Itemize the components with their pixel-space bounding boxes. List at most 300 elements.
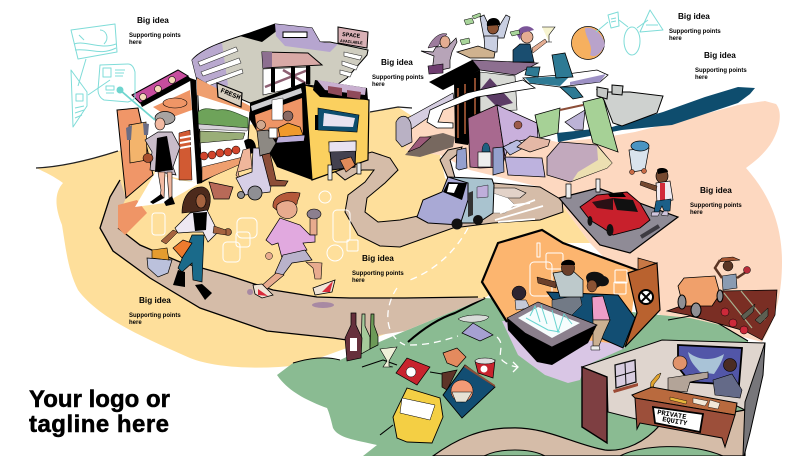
house outline — [482, 230, 637, 322]
products on hill — [345, 313, 495, 443]
shelf of fish — [200, 131, 245, 143]
roof sign — [313, 80, 368, 100]
roof sign panels — [328, 86, 361, 99]
big idea: right over water — [695, 51, 747, 81]
land: peach region — [405, 100, 782, 342]
parking pad with car — [559, 179, 678, 253]
shorts — [275, 250, 312, 275]
shelf — [198, 124, 248, 131]
big idea: top left: Big idea — [137, 16, 169, 25]
desk top — [632, 387, 737, 415]
produce section — [197, 78, 250, 182]
hologram buildings — [526, 305, 572, 332]
back wall — [582, 340, 765, 425]
door — [582, 367, 607, 443]
woman left body — [421, 38, 457, 72]
upper wing — [552, 53, 573, 78]
pink canopy — [132, 70, 188, 103]
teal: document — [608, 12, 619, 28]
person: woman walking with bags — [147, 187, 232, 300]
hologram screen — [518, 307, 580, 338]
door cross — [641, 292, 651, 302]
big idea: top right: here — [669, 36, 682, 42]
money pile — [457, 46, 495, 58]
table base — [507, 302, 597, 365]
mother hair — [586, 272, 609, 292]
globe land — [585, 28, 605, 56]
shark — [688, 352, 724, 374]
black pillar — [190, 78, 202, 184]
yellow building — [305, 85, 369, 180]
door round window — [639, 290, 653, 304]
farm — [667, 257, 777, 340]
shelf of tomatoes — [200, 146, 240, 160]
big idea: bottom left — [129, 296, 181, 326]
right leg — [306, 262, 322, 279]
bollards — [566, 179, 600, 198]
land: green region — [277, 298, 748, 456]
wall ornament — [514, 121, 522, 129]
upper windows — [283, 32, 307, 38]
sleeper — [517, 136, 550, 152]
awning — [262, 52, 322, 68]
fresh sign: FRESH — [219, 87, 241, 103]
teal belly — [525, 76, 570, 86]
sign: space available: AVAILABLE — [340, 40, 363, 46]
teal: triangle — [640, 10, 663, 32]
sunroof — [608, 193, 626, 197]
big idea: top right: Big idea — [678, 12, 710, 21]
wheelchair — [236, 148, 272, 195]
windshield — [443, 182, 467, 200]
big idea: bottom left: here — [129, 320, 142, 326]
man head — [724, 358, 736, 372]
teal node — [116, 86, 124, 94]
face — [277, 201, 297, 219]
orange bag — [173, 240, 192, 258]
big idea: center top — [372, 58, 424, 88]
robot vacuum — [629, 141, 649, 174]
father hair — [561, 260, 575, 265]
hand — [224, 228, 232, 236]
big idea: center top: here — [372, 82, 385, 88]
private equity sign — [653, 407, 703, 432]
statues — [456, 147, 504, 175]
bag label — [400, 398, 435, 420]
coastline strokes — [36, 107, 412, 168]
mother face — [587, 280, 597, 292]
big idea: by the road: Supporting points — [352, 271, 404, 277]
tail — [525, 67, 540, 77]
truck — [417, 177, 543, 230]
mother shirt — [592, 296, 610, 320]
dock shutter — [329, 141, 356, 152]
right wall — [743, 343, 765, 456]
road inner loop — [493, 188, 526, 198]
lilac bag — [147, 258, 172, 277]
house floor — [502, 320, 625, 383]
table top — [507, 302, 597, 347]
door tab — [638, 258, 656, 270]
person: man walking with phone — [247, 192, 335, 308]
wine bottle green — [370, 314, 378, 349]
face — [196, 194, 206, 208]
boots — [173, 270, 212, 300]
logo tagline: Your logo or — [29, 386, 170, 413]
drone — [458, 315, 493, 341]
counter — [276, 135, 305, 143]
truck side — [448, 177, 494, 223]
hair — [244, 139, 256, 154]
teal connectors — [596, 20, 648, 32]
stripes on rack — [180, 136, 191, 148]
mother legs — [593, 320, 610, 346]
lavender belly — [570, 74, 606, 85]
can label — [480, 366, 488, 372]
white floor in store — [135, 173, 200, 207]
man shirt — [484, 36, 498, 52]
big idea: bottom left: Big idea — [139, 296, 171, 305]
shirt — [266, 218, 315, 258]
kitchen sign — [272, 98, 283, 120]
safe — [478, 152, 491, 167]
child head — [512, 286, 526, 300]
counter person — [278, 123, 303, 137]
teal doodles: shopper thoughts — [71, 24, 155, 127]
tower and roof — [429, 60, 538, 145]
farmer overalls — [722, 274, 737, 290]
sign: space available — [338, 27, 368, 48]
wine label — [350, 338, 357, 351]
woman left hair — [428, 34, 447, 48]
airplane — [523, 53, 608, 99]
smoke — [493, 193, 515, 213]
kitchen truss — [251, 88, 302, 111]
pillow — [503, 140, 527, 155]
big idea: on peach land: Big idea — [700, 186, 732, 195]
car windshield — [613, 198, 638, 212]
desk items — [670, 397, 687, 404]
wine bottle light green — [361, 314, 370, 354]
mother shoes — [591, 346, 600, 350]
sign: space available: SPACE — [342, 31, 361, 40]
road: bottom path — [433, 410, 745, 456]
dark purple block — [480, 78, 513, 107]
cereal bowl — [452, 392, 472, 402]
beams — [265, 70, 308, 87]
swoosh — [427, 80, 535, 128]
salmon floor under door — [118, 200, 147, 235]
doodle card with star — [71, 24, 117, 59]
cereal plate — [451, 380, 473, 402]
window — [615, 360, 636, 388]
basket — [209, 182, 233, 199]
man advisor — [713, 374, 742, 398]
road edges — [100, 180, 478, 340]
face — [155, 118, 165, 130]
clothing interior — [140, 82, 198, 183]
field rows — [724, 291, 765, 328]
lower front — [202, 157, 247, 181]
small boat — [565, 110, 585, 130]
phone hand — [307, 209, 321, 219]
ship stacks — [597, 85, 623, 99]
left leg — [260, 273, 284, 290]
robot tractor — [678, 276, 720, 306]
big idea: top right — [669, 12, 721, 42]
big idea: bottom left: Supporting points — [129, 313, 181, 319]
purple roof — [472, 60, 538, 75]
bedspread — [547, 142, 612, 182]
father head — [562, 260, 574, 276]
big idea: by the road: here — [352, 278, 365, 284]
mirror — [482, 143, 490, 152]
connector lines — [78, 59, 110, 95]
store complex — [117, 24, 369, 198]
person: older woman shopper — [143, 112, 180, 206]
dress — [155, 136, 173, 172]
window side — [315, 115, 318, 130]
logo tagline: tagline here — [29, 411, 169, 438]
brown door — [625, 263, 660, 347]
bed base — [505, 157, 545, 177]
father pants — [552, 295, 582, 317]
curb rod — [641, 226, 659, 237]
woman right dress — [513, 44, 534, 62]
back building black wedge — [240, 24, 278, 42]
man face — [488, 22, 498, 34]
shadows — [247, 289, 334, 308]
farmer head — [723, 261, 733, 271]
big idea: on peach land — [690, 186, 742, 216]
back building window rows — [198, 47, 362, 86]
bedroom — [456, 97, 618, 182]
big idea: right over water: here — [695, 75, 708, 81]
screen — [678, 345, 742, 385]
martini — [380, 347, 397, 367]
clothing interior salmon wall — [153, 90, 192, 118]
shoe accents — [258, 281, 333, 296]
ceiling light — [163, 98, 187, 108]
canopy black strip — [140, 76, 192, 107]
roof sign lilac band — [317, 80, 366, 95]
woman left bag — [428, 64, 443, 74]
father arm — [537, 277, 556, 288]
garment sleeves — [126, 123, 149, 140]
boy with remote — [640, 168, 673, 216]
dirt pile — [405, 133, 455, 157]
tower — [454, 70, 480, 145]
cargo window — [477, 185, 488, 198]
woman left face — [440, 36, 450, 48]
jeans — [654, 199, 671, 212]
house with family — [482, 230, 660, 365]
wheels — [588, 216, 592, 226]
advisor head — [673, 356, 687, 370]
hanging garment — [129, 122, 147, 163]
farmer hat — [718, 257, 740, 262]
door — [468, 191, 473, 217]
fuselage — [523, 70, 608, 87]
bag contents — [152, 248, 169, 260]
shoes — [150, 194, 175, 206]
big idea: on peach land: here — [690, 210, 703, 216]
clothing rack — [179, 130, 192, 180]
jeans — [178, 235, 204, 282]
train — [396, 93, 454, 147]
white wall doodles — [530, 243, 627, 296]
teal: oval tag — [624, 27, 640, 55]
kitchen unit — [250, 82, 312, 180]
land: yellow region — [36, 107, 590, 368]
water — [557, 87, 755, 142]
man hair — [487, 18, 500, 26]
white doodles: around walkers — [152, 191, 358, 262]
big idea: top left — [129, 16, 181, 46]
left hand — [266, 252, 272, 260]
big idea: top right: Supporting points — [669, 29, 721, 35]
kitchen interior — [255, 98, 303, 142]
doodle list card — [98, 64, 135, 102]
tower orange bars — [458, 78, 475, 138]
arm — [213, 226, 226, 235]
big idea: center top: Supporting points — [372, 75, 424, 81]
person: man with tablet — [256, 120, 288, 186]
legs — [158, 172, 172, 198]
desk papers — [693, 398, 720, 409]
fresh sign — [217, 83, 242, 107]
ship — [565, 85, 663, 130]
teal pointer — [120, 90, 155, 120]
snack box logo — [406, 367, 416, 377]
big idea: by the road: Big idea — [362, 254, 394, 263]
arm to bag — [161, 230, 178, 244]
windshield glint — [447, 184, 458, 193]
office — [582, 340, 765, 456]
black roof — [429, 60, 480, 90]
red can — [475, 360, 495, 378]
window cross — [615, 363, 636, 385]
arm — [640, 181, 657, 191]
doodle tall panel — [71, 70, 87, 127]
skin — [236, 148, 252, 180]
shop door — [117, 108, 153, 198]
raised forearm — [310, 217, 317, 235]
yellow bag — [393, 388, 443, 443]
posts — [271, 66, 310, 92]
soil — [667, 290, 777, 340]
wheels — [452, 218, 462, 230]
car body — [580, 192, 650, 235]
purple rock — [408, 137, 431, 152]
woman advisor — [668, 372, 708, 392]
green ridge outlines — [293, 316, 748, 435]
chef head — [283, 111, 293, 121]
father shirt — [553, 270, 583, 297]
yellow building window — [318, 108, 359, 132]
hair — [273, 192, 300, 213]
windows under awning — [263, 67, 310, 95]
leaves — [741, 304, 768, 324]
green patches in bottom path — [484, 447, 723, 456]
big idea: top left: here — [129, 40, 142, 46]
jacket — [175, 210, 218, 242]
box brown edge — [464, 365, 495, 387]
big idea: on peach land: Supporting points — [690, 203, 742, 209]
lettuce — [198, 109, 248, 128]
big idea: by the road — [352, 254, 404, 284]
strawberries — [721, 308, 748, 334]
man arms — [480, 15, 510, 38]
private equity sign: EQUITY — [661, 416, 688, 428]
lamp — [643, 373, 661, 395]
hair — [182, 187, 210, 213]
brown box — [442, 370, 457, 390]
loading dock — [329, 141, 356, 170]
gray annex — [480, 72, 517, 112]
big idea: right over water: Supporting points — [695, 68, 747, 74]
woman right hair — [517, 26, 534, 40]
woman right face — [521, 31, 533, 43]
tractor wheels — [678, 295, 686, 309]
back building purple top — [275, 24, 338, 52]
shoes — [651, 211, 668, 216]
speed lines — [495, 200, 543, 222]
sofa — [547, 292, 635, 348]
canopy lights — [140, 76, 176, 100]
dashed flight path — [388, 228, 517, 367]
bollards — [328, 163, 361, 180]
martini glass — [542, 27, 555, 42]
curtain rod — [560, 105, 583, 110]
woman right arm — [532, 39, 547, 53]
orange parcel — [443, 348, 466, 367]
flying dollars — [460, 13, 520, 45]
person: wheelchair user — [236, 139, 272, 200]
navy cereal box — [443, 365, 495, 418]
private equity sign: PRIVATE — [656, 409, 687, 422]
cardigan — [145, 132, 180, 175]
arrow head — [513, 362, 518, 372]
back building — [192, 24, 368, 103]
can lid — [475, 358, 495, 364]
people on roof with money — [421, 13, 555, 74]
strawberry in hand — [744, 266, 750, 274]
dock box — [340, 157, 355, 172]
logo tagline — [29, 386, 170, 438]
road: winding path past truck — [333, 147, 563, 247]
back building purple left shading — [192, 43, 228, 92]
produce header — [197, 78, 250, 112]
hair — [155, 112, 175, 124]
big idea: center top: Big idea — [381, 58, 413, 67]
window glass — [323, 113, 355, 127]
road: main walking path — [100, 180, 485, 340]
left wall — [468, 105, 505, 168]
red snack box — [396, 358, 430, 385]
globe with doodles — [572, 10, 663, 60]
window sill — [613, 383, 638, 393]
wine bottle maroon — [345, 313, 362, 361]
house wall — [482, 230, 637, 345]
shoes — [253, 280, 335, 298]
bedspread cream edge — [572, 146, 612, 181]
right wall — [497, 105, 538, 157]
awning dark end — [262, 52, 272, 68]
car side windows — [592, 198, 613, 210]
truck hood and front — [417, 177, 468, 225]
lower wing — [560, 87, 583, 99]
